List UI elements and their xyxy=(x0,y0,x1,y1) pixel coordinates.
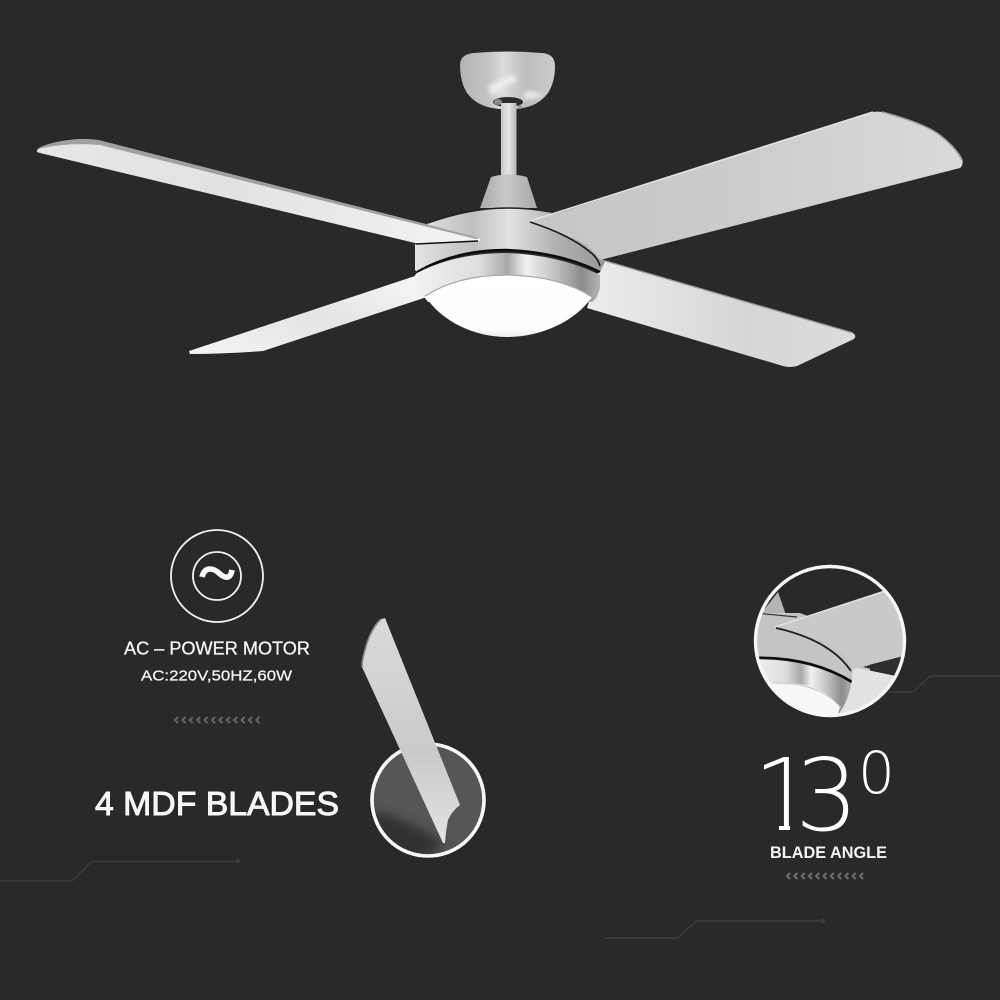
zoom: motor body xyxy=(757,613,870,684)
blade detail: single blade xyxy=(362,618,460,843)
zoom: lamp xyxy=(772,683,840,714)
downrod xyxy=(501,103,516,177)
big value: 13 degrees: 1 xyxy=(753,737,817,854)
fan blade: lower right xyxy=(587,260,855,367)
chevron row: left xyxy=(175,717,259,723)
big value: 13 degrees xyxy=(764,750,890,832)
decorative circuit line: right xyxy=(888,676,1000,692)
fan blade: upper right xyxy=(530,112,963,266)
zoom: chrome xyxy=(760,659,851,714)
big value: 13 degrees: 3 xyxy=(795,737,859,854)
motor housing xyxy=(415,208,605,272)
ceiling canopy xyxy=(460,52,555,110)
ceiling fan product image xyxy=(37,52,963,367)
zoom: dark gap xyxy=(863,665,870,669)
big value: 13 degrees: 0 xyxy=(858,739,895,807)
zoom: main blade xyxy=(809,592,903,669)
AC motor icon xyxy=(171,530,263,622)
fan blade: upper left xyxy=(37,139,480,244)
heading: 4 MDF blades: 4 MDF BLADES xyxy=(95,785,339,822)
zoom: cone xyxy=(762,592,786,613)
zoom: lower blade xyxy=(839,668,894,714)
heading: AC power motor: AC – POWER MOTOR xyxy=(124,638,310,658)
chevron row: right xyxy=(787,873,863,879)
angle detail: zoomed fan circle xyxy=(754,564,906,718)
decorative circuit line: bottom left xyxy=(0,858,240,881)
blade detail: circle backdrop xyxy=(370,744,484,860)
text: AC specification: AC:220V,50HZ,60W xyxy=(141,668,293,684)
chrome trim ring xyxy=(415,253,600,302)
fan blade: lower left xyxy=(189,276,430,354)
label: blade angle: BLADE ANGLE xyxy=(770,844,887,862)
motor cone xyxy=(480,174,537,208)
decorative circuit line: bottom right xyxy=(605,918,826,938)
lamp dome xyxy=(425,275,592,337)
